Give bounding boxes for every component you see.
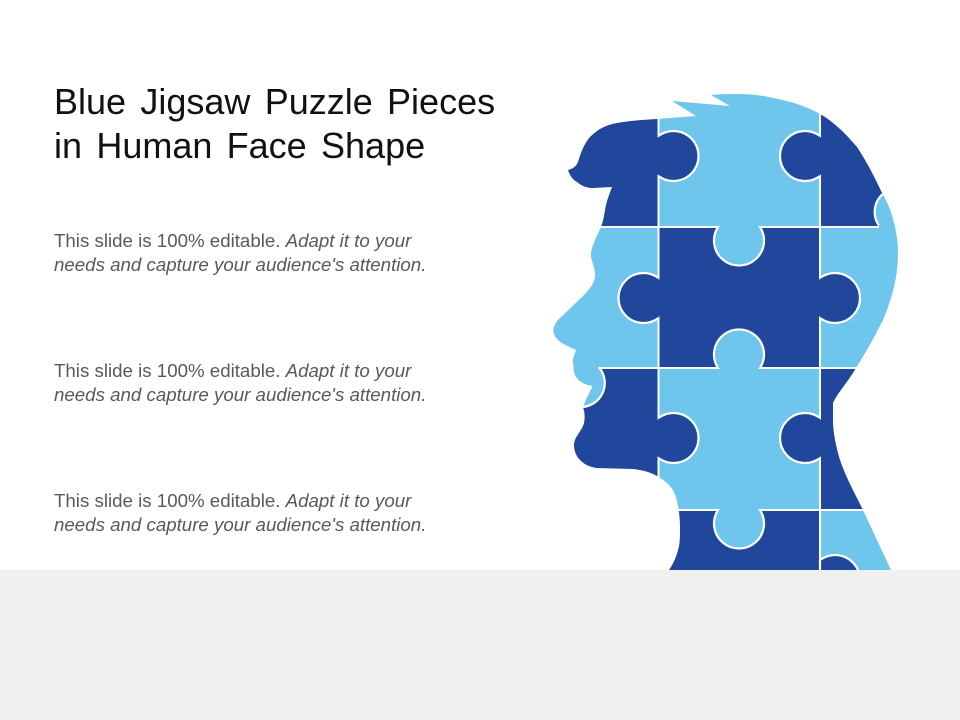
knob: row 3 left (656, 413, 698, 463)
knob: row 2 right (818, 273, 860, 323)
puzzle head silhouette (553, 94, 898, 570)
puzzle knobs (573, 130, 896, 570)
row 4 cells (669, 510, 891, 570)
text block 2: This slide is 100% editable. Adapt it to your (54, 360, 411, 381)
title (54, 81, 495, 166)
knob: mouth (573, 366, 606, 408)
title: in Human Face Shape (54, 125, 425, 166)
title: Blue Jigsaw Puzzle Pieces (54, 81, 495, 122)
row 2 cells (540, 227, 920, 368)
knob: row 2 left (618, 273, 660, 323)
knob: row 4 right (818, 554, 859, 570)
text block 3: needs and capture your audience's attention. (54, 514, 426, 534)
knob: row 1 left (656, 131, 698, 181)
text block 3: This slide is 100% editable. Adapt it to your (54, 490, 411, 511)
knob: row 2 bottom (714, 329, 764, 370)
knob: row 2 top (714, 225, 764, 266)
knob: back of head (874, 193, 896, 229)
knob: row 1 right (780, 131, 822, 181)
text block 1 (54, 230, 426, 275)
row 3 cells (574, 368, 863, 510)
row 1 cells (568, 94, 895, 227)
text block 1: This slide is 100% editable. Adapt it to your (54, 230, 411, 251)
text block 3 (54, 490, 426, 535)
knob: row 3 bottom (714, 508, 764, 549)
bottom grey band (0, 570, 960, 720)
text block 2 (54, 360, 426, 405)
text block 2: needs and capture your audience's attention. (54, 384, 426, 404)
knob: row 3 right (780, 413, 822, 463)
text block 1: needs and capture your audience's attention. (54, 254, 426, 274)
